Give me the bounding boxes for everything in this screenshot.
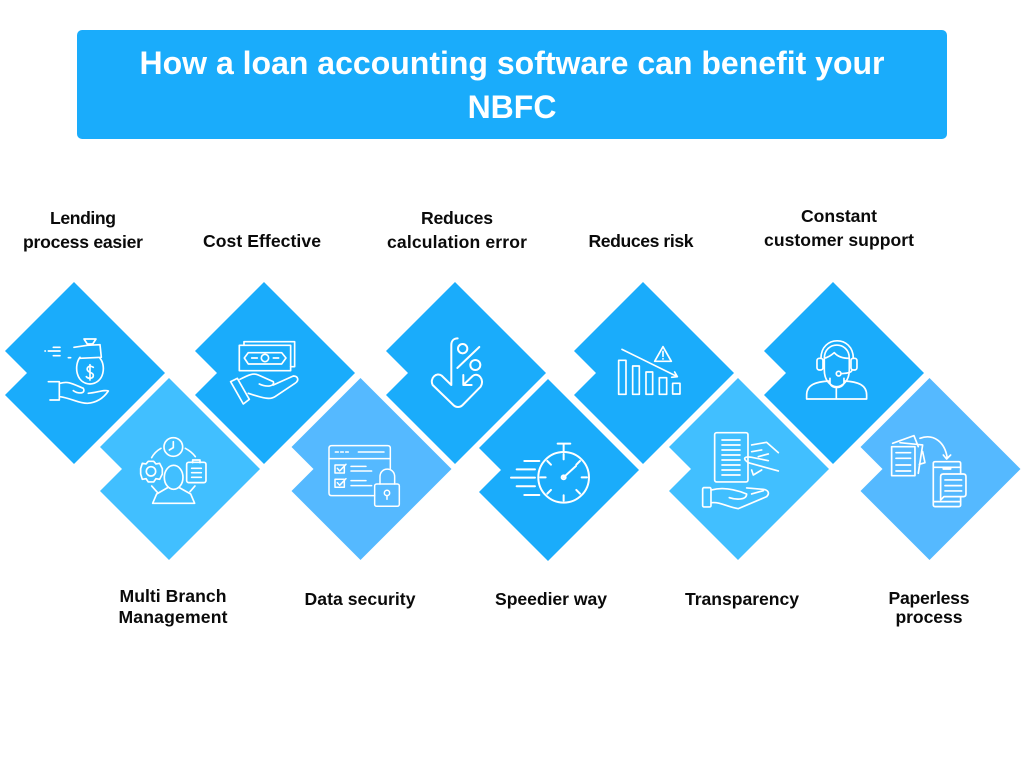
title banner — [77, 30, 947, 139]
label: lending process easier — [23, 208, 143, 252]
panel: multi branch management — [100, 378, 260, 560]
label: constant customer support: customer support — [764, 230, 914, 250]
label: lending process easier: process easier — [23, 232, 143, 252]
icon: browser checklist with lock — [329, 446, 399, 506]
label: paperless process: process — [896, 607, 963, 627]
label: data security: Data security — [304, 589, 416, 609]
label: multi branch management: Management — [118, 607, 228, 627]
icon: percent down arrow — [432, 338, 482, 407]
label: cost effective: Cost Effective — [203, 231, 321, 251]
icon: headset agent — [807, 341, 867, 399]
panel: data security — [292, 378, 452, 560]
label: reduces calculation error — [387, 208, 527, 252]
icon: banknotes over hand — [231, 342, 298, 404]
panel: lending process easier — [5, 282, 165, 464]
panel: constant customer support — [764, 282, 924, 464]
label: multi branch management — [118, 586, 228, 627]
panel: reduces calculation error — [386, 282, 546, 464]
panel: paperless process — [860, 378, 1020, 560]
title banner: NBFC — [468, 89, 556, 125]
title banner: How a loan accounting software can benefit your — [140, 45, 884, 81]
label: paperless process: Paperless — [888, 588, 970, 608]
label: paperless process — [888, 588, 970, 627]
icon: document and hands — [703, 433, 778, 509]
label: transparency: Transparency — [685, 589, 799, 609]
label: reduces calculation error: calculation error — [387, 232, 527, 252]
label: reduces risk: Reduces risk — [588, 231, 694, 251]
label: constant customer support: Constant — [801, 206, 877, 226]
label: multi branch management: Multi Branch — [120, 586, 226, 606]
panel: transparency — [669, 378, 829, 560]
panel: cost effective — [195, 282, 355, 464]
panel: speedier way — [479, 379, 639, 561]
icon: money bag over hand — [45, 339, 108, 403]
icon: paper to phone — [892, 436, 966, 507]
icon: falling bar chart with warning — [619, 347, 680, 394]
icon: person with clock gear clipboard — [141, 438, 206, 503]
label: reduces calculation error: Reduces — [421, 208, 493, 228]
panel: reduces risk — [574, 282, 734, 464]
label: constant customer support — [764, 206, 914, 250]
label: lending process easier: Lending — [50, 208, 116, 228]
icon: stopwatch — [511, 444, 589, 503]
label: speedier way: Speedier way — [495, 589, 607, 609]
